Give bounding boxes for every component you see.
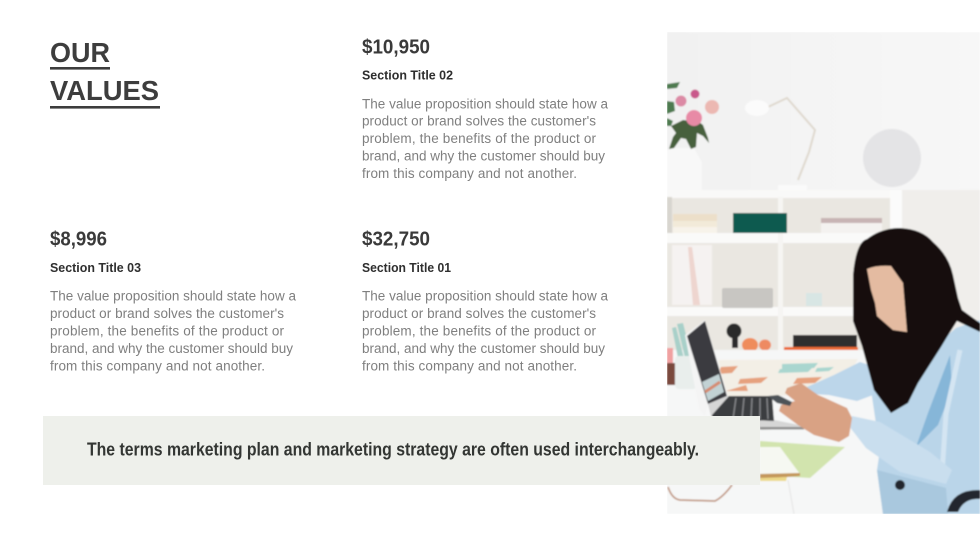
- body text: section 02: [362, 96, 608, 181]
- title: OUR VALUES: OUR: [50, 37, 110, 68]
- callout text: The terms marketing plan and marketing strategy are often used interchangeably.: [87, 440, 699, 460]
- body text: section 03: problem, the benefits of the product or: [50, 324, 284, 338]
- body text: section 03: from this company and not another.: [50, 358, 265, 374]
- woman's face: [867, 266, 907, 332]
- body text: section 01: from this company and not another.: [362, 358, 577, 374]
- body text: section 03: product or brand solves the customer's: [50, 306, 284, 321]
- body text: section 02: The value proposition should state how a: [362, 96, 608, 111]
- title: OUR VALUES: [50, 37, 160, 109]
- body text: section 01: The value proposition should state how a: [362, 288, 608, 304]
- heading: section title 01: Section Title 01: [362, 260, 451, 275]
- white desk: [667, 347, 866, 396]
- body text: section 01: [362, 288, 608, 374]
- woman's long dark hair: [853, 228, 980, 413]
- body text: section 01: brand, and why the customer should buy: [362, 341, 605, 356]
- body text: section 02: product or brand solves the customer's: [362, 114, 596, 129]
- amount: $32,750: $32,750: [362, 228, 430, 250]
- woman's hands holding phone: [768, 383, 852, 442]
- panel: section 03: [50, 228, 296, 374]
- heading: section title 03: Section Title 03: [50, 260, 141, 275]
- panel: section 02: [362, 36, 608, 181]
- body text: section 03: brand, and why the customer should buy: [50, 341, 293, 356]
- icon: white desk lamp: [745, 98, 815, 190]
- photo: woman working at a desk with phone and laptop: [667, 32, 980, 514]
- body text: section 03: The value proposition should state how a: [50, 288, 296, 304]
- heading: section title 02: Section Title 02: [362, 68, 453, 82]
- body text: section 02: brand, and why the customer should buy: [362, 149, 605, 164]
- icon: open laptop: [685, 320, 806, 430]
- panel: section 01: [362, 228, 608, 374]
- body text: section 02: from this company and not another.: [362, 166, 577, 181]
- icon: glasses on desk: [668, 485, 732, 501]
- body text: section 01: problem, the benefits of the product or: [362, 324, 596, 338]
- title: OUR VALUES: VALUES: [50, 75, 159, 106]
- amount: $10,950: $10,950: [362, 36, 430, 58]
- amount: $8,996: $8,996: [50, 228, 107, 250]
- icon: notebook and green folder on desk: [760, 441, 845, 514]
- body text: section 01: product or brand solves the customer's: [362, 306, 596, 321]
- body text: section 02: problem, the benefits of the product or: [362, 131, 596, 146]
- icon: vase with pink flowers: [667, 81, 720, 150]
- icon: round wall ornament: [863, 129, 921, 187]
- woman's jacket: [807, 320, 980, 514]
- callout banner: [43, 416, 760, 485]
- body text: section 03: [50, 288, 296, 374]
- white shelving unit: [667, 197, 890, 351]
- icon: pen cup: [672, 323, 697, 389]
